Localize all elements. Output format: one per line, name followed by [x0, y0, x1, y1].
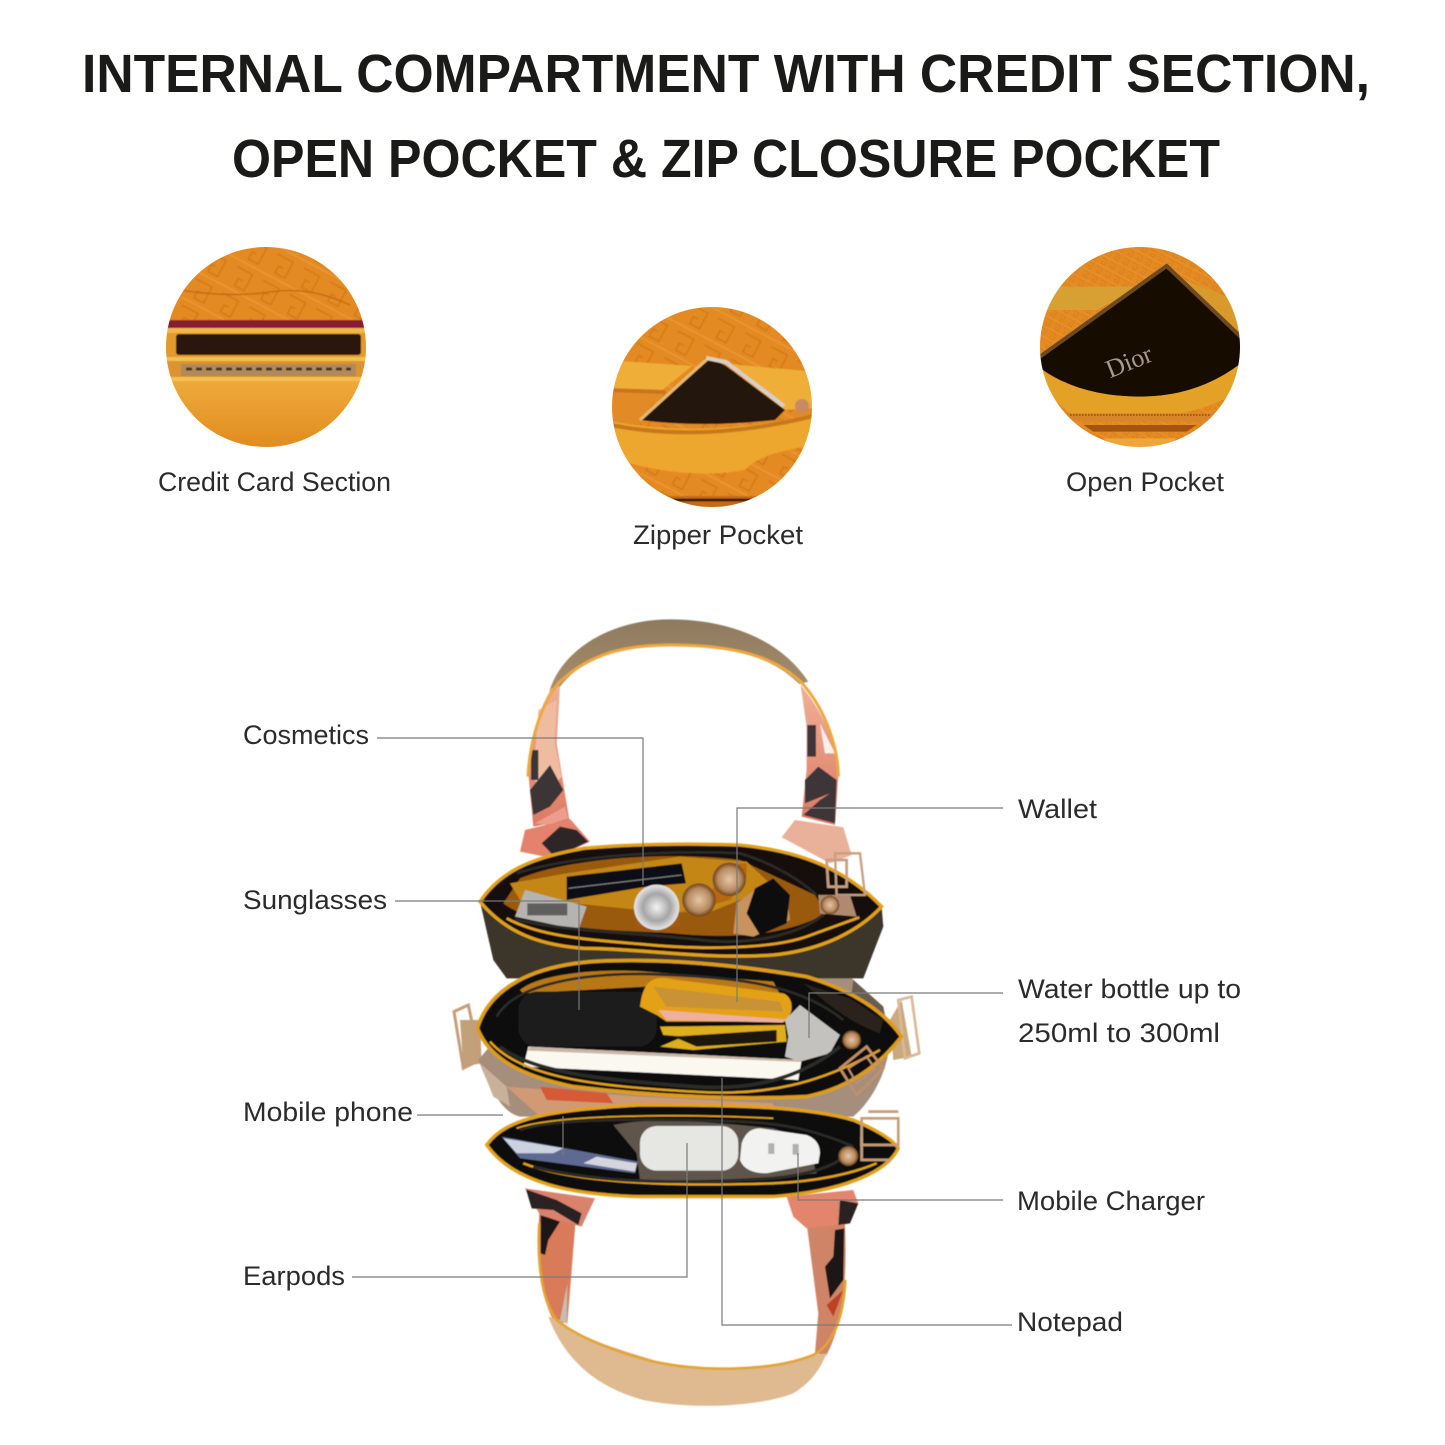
label: water bottle [1018, 974, 1241, 1048]
label: water bottle: 250ml to 300ml [1018, 1018, 1220, 1048]
label: mobile phone: Mobile phone [243, 1097, 413, 1127]
leader: earpods [352, 1143, 687, 1277]
label: water bottle: Water bottle up to [1018, 974, 1241, 1004]
bottom handle [525, 1188, 858, 1406]
side buckles [454, 997, 919, 1068]
label: mobile charger: Mobile Charger [1017, 1186, 1205, 1216]
panel: credit card section photo [166, 247, 366, 447]
compartment 1 opening [480, 844, 882, 956]
label: sunglasses: Sunglasses [243, 885, 387, 915]
leader: notepad [722, 1078, 1012, 1325]
item: wallet [640, 978, 792, 1052]
label: zipper pocket: Zipper Pocket [633, 520, 804, 550]
item: sunglasses case [518, 992, 657, 1047]
compartment 2 opening [477, 960, 902, 1098]
zipper front 1 [515, 915, 823, 942]
title [82, 44, 1370, 189]
item: sunglasses tag [515, 890, 587, 930]
item: mobile phone [502, 1137, 638, 1173]
bag body and compartments [454, 844, 919, 1197]
item: earpods case [640, 1126, 738, 1171]
top metal buckle [818, 853, 865, 917]
fold line [507, 917, 859, 948]
label: cosmetics: Cosmetics [243, 720, 369, 750]
top handle [520, 619, 852, 863]
compartment 1 back body [480, 844, 883, 978]
leader: mobile charger [798, 1153, 1003, 1200]
gold zipper pull and buckle [840, 1031, 883, 1095]
label: open pocket: Open Pocket [1066, 467, 1225, 497]
label: notepad: Notepad [1017, 1307, 1123, 1337]
leader: cosmetics [377, 738, 643, 885]
compartment 3 opening [487, 1105, 898, 1197]
label: wallet: Wallet [1018, 794, 1098, 824]
item: notepad [523, 1047, 802, 1080]
handle tabs: bottom [525, 1188, 595, 1227]
zipper front 2 [500, 1047, 840, 1087]
gold buckle [838, 1112, 898, 1166]
label: credit card section: Credit Card Section [158, 467, 391, 497]
item: water bottle pouch [785, 1005, 840, 1062]
leader: water bottle [809, 993, 1003, 1038]
leader: mobile phone [417, 1115, 563, 1155]
leader: sunglasses [395, 901, 579, 1010]
handbag illustration [454, 619, 919, 1406]
leader: wallet [737, 808, 1003, 1002]
panel: zipper pocket photo [612, 307, 812, 507]
label: earpods: Earpods [243, 1261, 345, 1291]
middle section patterned exterior [478, 970, 890, 1117]
title: OPEN POCKET & ZIP CLOSURE POCKET [232, 129, 1220, 189]
handle tabs: top [520, 819, 590, 858]
title: INTERNAL COMPARTMENT WITH CREDIT SECTION, [82, 44, 1370, 104]
item: mobile charger [740, 1128, 820, 1173]
logo text in photo: Dior [1101, 339, 1157, 384]
item: cosmetics [567, 863, 790, 937]
panel: open pocket photo [1040, 247, 1240, 447]
